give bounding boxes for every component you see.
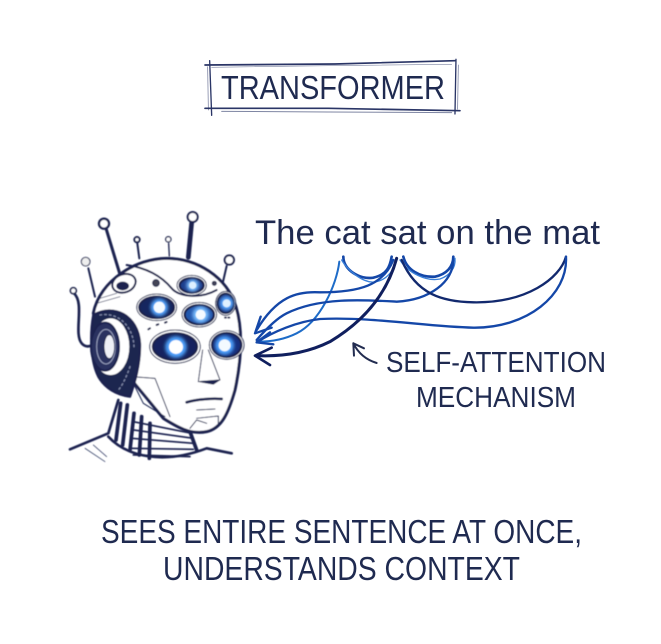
title text: TRANSFORMER: [221, 69, 445, 106]
head panel lines: [97, 265, 229, 428]
self-attention arrows: [255, 257, 566, 365]
title box: [205, 59, 460, 115]
skull and face: [93, 258, 241, 432]
robot head illustration: [70, 212, 244, 462]
sentence: The cat sat on the mat: [255, 214, 601, 252]
antennas: [70, 212, 234, 346]
bottom caption: [101, 513, 582, 587]
eyes: [137, 275, 244, 363]
bottom caption: UNDERSTANDS CONTEXT: [163, 550, 520, 587]
ear headphone: [91, 311, 140, 397]
neck: [70, 400, 232, 462]
annotation label: [386, 347, 606, 414]
annotation label: SELF-ATTENTION: [386, 347, 606, 379]
bottom caption: SEES ENTIRE SENTENCE AT ONCE,: [101, 513, 582, 550]
annotation arrow: [353, 343, 377, 363]
annotation label: MECHANISM: [416, 382, 576, 414]
